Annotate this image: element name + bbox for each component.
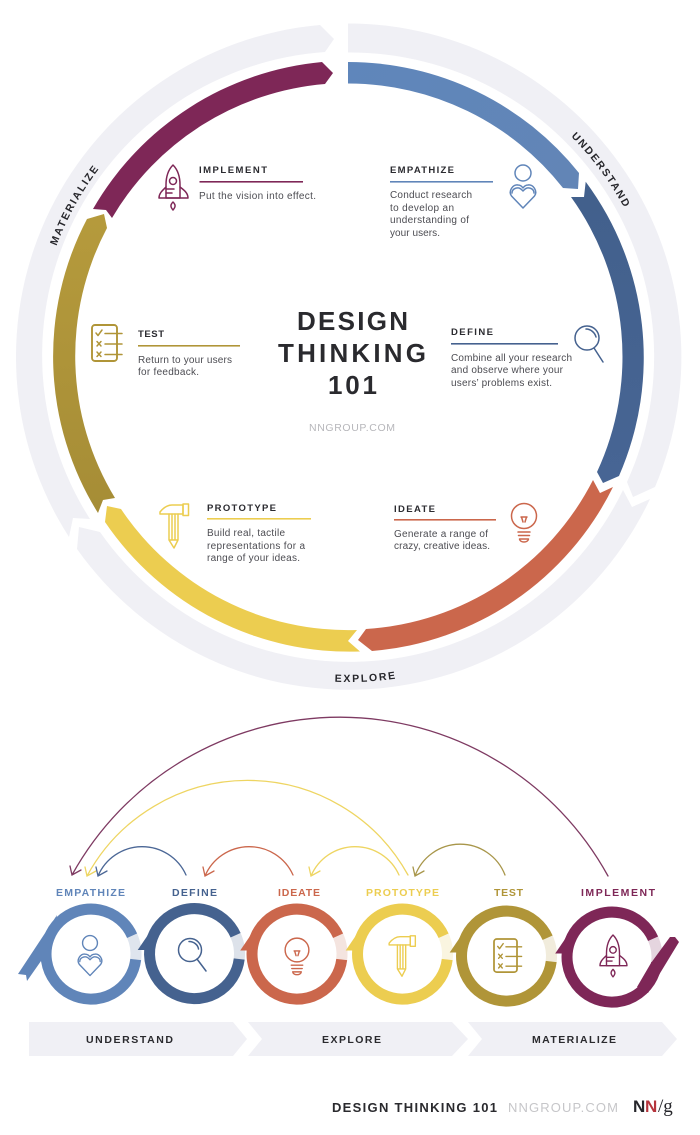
panel: test: Return to your users: [138, 355, 232, 366]
icon: hammer pencil: [160, 504, 188, 548]
logo: NN/g: /g: [658, 1096, 673, 1117]
panel: ideate: [394, 504, 536, 552]
step: prototype: PROTOTYPE: [366, 887, 439, 899]
title: DESIGN: [297, 306, 408, 336]
phase bar: understand: UNDERSTAND: [86, 1034, 173, 1046]
phase bar: materialize: MATERIALIZE: [532, 1034, 616, 1046]
ring: define: [138, 909, 240, 999]
panel: empathize: understanding of: [390, 215, 469, 226]
panel: define: and observe where your: [451, 365, 564, 376]
arrow segment: test: [53, 214, 115, 513]
title: 101: [328, 370, 377, 400]
panel: ideate: Generate a range of: [394, 529, 488, 540]
panel: prototype: Build real, tactile: [207, 528, 285, 539]
step: empathize: EMPATHIZE: [56, 887, 125, 899]
logo: NN/g: N: [645, 1097, 657, 1116]
logo: NN/g: N: [633, 1097, 645, 1116]
phase label: explore: EXPLORE: [335, 672, 395, 682]
outer phase ring: [16, 24, 682, 690]
icon: magnifier: [575, 326, 603, 362]
step: implement: [555, 887, 679, 1002]
phase bar: understand: [29, 1022, 247, 1056]
icon: rocket: [159, 165, 188, 210]
step: ideate: IDEATE: [278, 887, 320, 899]
footer: NNGROUP.COM: [508, 1100, 618, 1115]
step: define: DEFINE: [172, 887, 217, 899]
arrow: prototype back to ideate: [309, 847, 399, 876]
panel: empathize: EMPATHIZE: [390, 165, 454, 176]
panel: test: for feedback.: [138, 367, 199, 378]
phase band: understand: [348, 24, 681, 497]
ring: prototype: [346, 909, 448, 999]
panel: test: [92, 325, 240, 378]
panel: empathize: to develop an: [390, 203, 454, 214]
ring: test: [450, 911, 552, 1001]
phase band: explore: [77, 490, 650, 690]
step: implement: IMPLEMENT: [581, 887, 656, 899]
panel: ideate: IDEATE: [394, 504, 435, 515]
logo: NN/g: [633, 1096, 673, 1117]
icon: magnifier: [178, 938, 206, 971]
phase bar: materialize: [468, 1022, 677, 1056]
panel: prototype: [160, 503, 311, 564]
panel: implement: [159, 165, 316, 210]
panel: implement: Put the vision into effect.: [199, 191, 316, 202]
arrow segment: empathize: [348, 62, 579, 189]
footer: [332, 1096, 673, 1117]
source url: NNGROUP.COM: [309, 422, 395, 434]
main colored cycle ring: [53, 62, 644, 652]
title: [278, 306, 426, 400]
panel: prototype: PROTOTYPE: [207, 503, 276, 514]
phase bar: explore: EXPLORE: [322, 1034, 381, 1046]
panel: prototype: representations for a: [207, 541, 305, 552]
ring: ideate: [240, 909, 342, 999]
loop-back arrows: [70, 717, 608, 876]
panel: define: users’ problems exist.: [451, 378, 552, 389]
ring: implement: [555, 912, 679, 1002]
footer: DESIGN THINKING 101: [332, 1100, 497, 1115]
icon: rocket: [600, 935, 627, 977]
panel: empathize: your users.: [390, 228, 440, 239]
step: ideate: [240, 887, 342, 999]
panel: define: [451, 326, 603, 389]
icon: light bulb: [512, 504, 536, 542]
panel: define: DEFINE: [451, 327, 493, 338]
icon: checklist: [92, 325, 122, 361]
step: test: [450, 887, 552, 1001]
arrow: prototype back to empathize: [85, 780, 408, 876]
phase label: understand: UNDERSTAND: [572, 132, 629, 206]
arrow: ideate back to define: [203, 847, 293, 876]
panel: empathize: [390, 165, 536, 239]
panel: ideate: crazy, creative ideas.: [394, 541, 490, 552]
icon: light bulb: [285, 938, 309, 975]
title: THINKING: [278, 338, 426, 368]
icon: person with heart: [510, 165, 536, 208]
step: test: TEST: [494, 887, 524, 899]
step: define: [138, 887, 240, 999]
panel: empathize: Conduct research: [390, 190, 472, 201]
icon: person with heart: [78, 936, 102, 976]
phase band: materialize: [16, 25, 334, 537]
panel: prototype: range of your ideas.: [207, 553, 300, 564]
step: empathize: [18, 887, 136, 999]
panel: implement: IMPLEMENT: [199, 165, 267, 176]
icon: hammer pencil: [389, 936, 415, 976]
arrow: define back to empathize: [96, 847, 186, 876]
arrow segment: ideate: [358, 480, 613, 651]
arrow: implement back to empathize: [70, 717, 608, 876]
step: prototype: [346, 887, 448, 999]
arrow segment: implement: [93, 62, 333, 218]
arrow segment: prototype: [105, 506, 360, 652]
arrow: test back to prototype: [413, 844, 505, 876]
phase bar: explore: [248, 1022, 468, 1056]
panel: define: Combine all your research: [451, 353, 572, 364]
arrow segment: define: [571, 182, 644, 483]
icon: checklist: [494, 939, 522, 972]
panel: test: TEST: [138, 329, 164, 340]
ring: empathize: [18, 909, 136, 999]
phase label: materialize: MATERIALIZE: [50, 165, 98, 246]
